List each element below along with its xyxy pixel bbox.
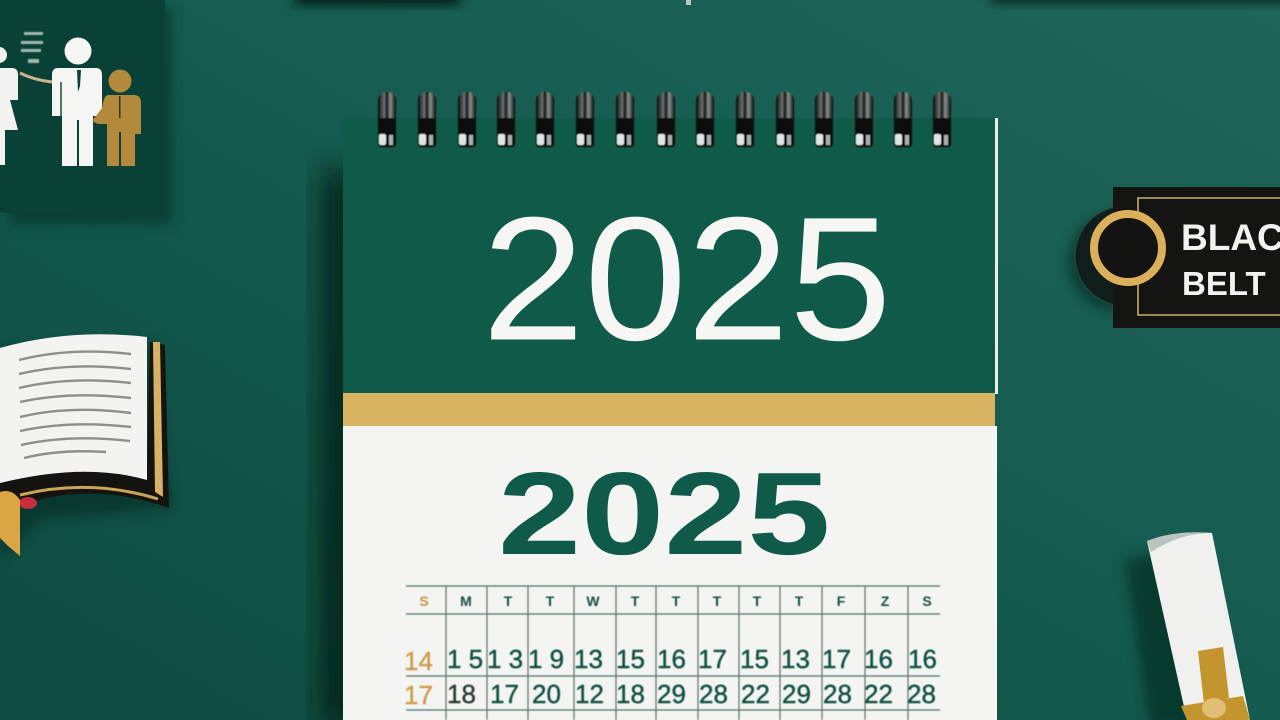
tiny caption [21,32,43,63]
weekday headers: T [546,593,555,609]
weekday headers: T [795,593,804,609]
weekday headers: T [713,593,722,609]
date row two: 28 [823,679,852,709]
calendar header [343,118,995,394]
weekday headers: S [922,593,932,609]
spiral binding [378,92,951,147]
gold ribbon [1198,647,1229,704]
weekday headers: T [753,593,762,609]
date row two: 12 [575,679,604,709]
date row two: 29 [782,679,811,709]
badge: black belt [1068,187,1280,340]
book cover [0,342,169,508]
weekday headers: M [460,593,472,609]
date row two: 28 [699,679,728,709]
top small object [686,0,691,5]
weekday headers: F [837,593,846,609]
ribbon [1112,285,1135,340]
bookmark [19,497,37,509]
weekday headers: W [586,593,600,609]
date row one: 1 5 [447,644,483,674]
icon: child gold [92,70,141,166]
panel: open book [0,334,172,560]
badge plate [1113,187,1280,328]
date row one: 15 [616,644,645,674]
date row two: 17 [404,680,433,710]
date row one: 13 [574,644,603,674]
book page [0,334,147,483]
date row one: 1 3 [487,644,523,674]
green year: 2025 [498,448,830,579]
calendar page [343,426,997,720]
ribbon knot [1202,698,1226,718]
top edge shadows [295,0,1280,5]
badge outer disc [1075,206,1175,306]
calendar shadow [322,170,362,720]
date row one: 16 [864,644,893,674]
date row two: 18 [616,679,645,709]
icon: woman [0,47,18,165]
gold ring [1094,214,1162,282]
panel: calendar [343,118,998,720]
icon: man white [52,38,102,166]
date row one: 14 [404,646,433,676]
date row one: 16 [908,644,937,674]
gold border [1138,198,1280,315]
panel: people icons [0,0,172,224]
white year: 2025 [482,181,892,378]
date row two: 22 [741,679,770,709]
weekday headers: Z [881,593,890,609]
date row two: 20 [532,679,561,709]
weekday headers: S [419,593,429,609]
scroll body [1147,532,1250,720]
date row two: 28 [907,679,936,709]
date row two: 18 [447,679,476,709]
badge: black belt: BELT [1182,265,1266,302]
page lines [19,352,131,458]
date row two: 29 [657,679,686,709]
weekday headers [419,593,932,609]
date row two [404,679,936,710]
date row one: 16 [657,644,686,674]
date row two: 17 [490,679,519,709]
weekday headers: T [672,593,681,609]
date row one [404,644,937,676]
date row one: 17 [822,644,851,674]
date row one: 15 [740,644,769,674]
arrow: pointing line [20,73,52,82]
weekday headers: T [504,593,513,609]
weekday headers: T [631,593,640,609]
date row one: 13 [781,644,810,674]
date row one: 1 9 [528,644,564,674]
gold band [343,393,995,426]
calendar grid [404,586,940,720]
date row two: 22 [864,679,893,709]
date row one: 17 [698,644,727,674]
scroll diploma [1125,532,1250,720]
